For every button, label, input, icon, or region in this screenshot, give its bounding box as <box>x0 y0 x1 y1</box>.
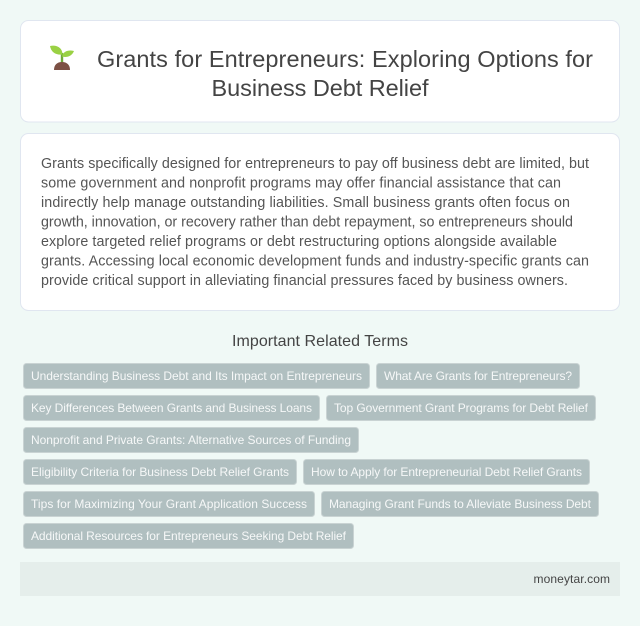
icon: sprout <box>50 46 74 70</box>
text block: summary paragraph: provide critical support in alleviating financial pressures faced by business owners. <box>41 273 568 289</box>
tag: top government programs <box>326 396 596 420</box>
tag: top government programs: Top Government Grant Programs for Debt Relief <box>334 401 589 415</box>
tag: eligibility criteria: Eligibility Criteria for Business Debt Relief Grants <box>31 465 289 479</box>
tag: managing grant funds <box>322 492 598 516</box>
tag: additional resources <box>24 524 354 548</box>
panel: title card <box>20 20 620 122</box>
panel: summary text <box>20 134 620 310</box>
heading: important related terms: Important Related Terms <box>232 333 408 350</box>
text block: summary paragraph: Grants specifically designed for entrepreneurs to pay off business debt are limited, but <box>41 156 589 172</box>
tag list: related terms <box>24 364 598 548</box>
tag: key differences: Key Differences Between Grants and Business Loans <box>31 401 312 415</box>
tag: what are grants <box>376 364 580 388</box>
tag: nonprofit and private grants: Nonprofit and Private Grants: Alternative Sources of Funding <box>31 433 351 447</box>
text block: summary paragraph: some government and nonprofit programs may offer financial assistance that can <box>41 176 561 192</box>
tag: understanding business debt <box>24 364 370 388</box>
tag: how to apply: How to Apply for Entrepreneurial Debt Relief Grants <box>311 465 582 479</box>
tag: tips for maximizing: Tips for Maximizing Your Grant Application Success <box>31 497 307 511</box>
tag: what are grants: What Are Grants for Entrepreneurs? <box>384 369 572 383</box>
text block: summary paragraph <box>41 156 589 289</box>
tag: eligibility criteria <box>24 460 296 484</box>
text block: summary paragraph: growth, innovation, or recovery rather than debt repayment, so entrepreneurs should <box>41 214 573 230</box>
tag: nonprofit and private grants <box>24 428 358 452</box>
text block: summary paragraph: indirectly help manage outstanding liabilities. Small business grants often focus on <box>41 195 570 211</box>
tag: additional resources: Additional Resources for Entrepreneurs Seeking Debt Relief <box>31 529 347 543</box>
text block: summary paragraph: explore targeted relief programs or debt restructuring options alongside available <box>41 234 557 250</box>
title <box>97 46 593 101</box>
tag: tips for maximizing <box>24 492 314 516</box>
tag: how to apply <box>304 460 590 484</box>
tag: managing grant funds: Managing Grant Funds to Alleviate Business Debt <box>329 497 592 511</box>
footer: moneytar.com <box>534 572 610 586</box>
title: Business Debt Relief <box>212 75 429 101</box>
tag: key differences <box>24 396 320 420</box>
tag: understanding business debt: Understanding Business Debt and Its Impact on Entrepreneurs <box>31 369 362 383</box>
title: Grants for Entrepreneurs: Exploring Options for <box>97 46 593 72</box>
text block: summary paragraph: grants. Accessing local economic development funds and industry-specific grants can <box>41 254 589 270</box>
footer <box>20 562 620 596</box>
